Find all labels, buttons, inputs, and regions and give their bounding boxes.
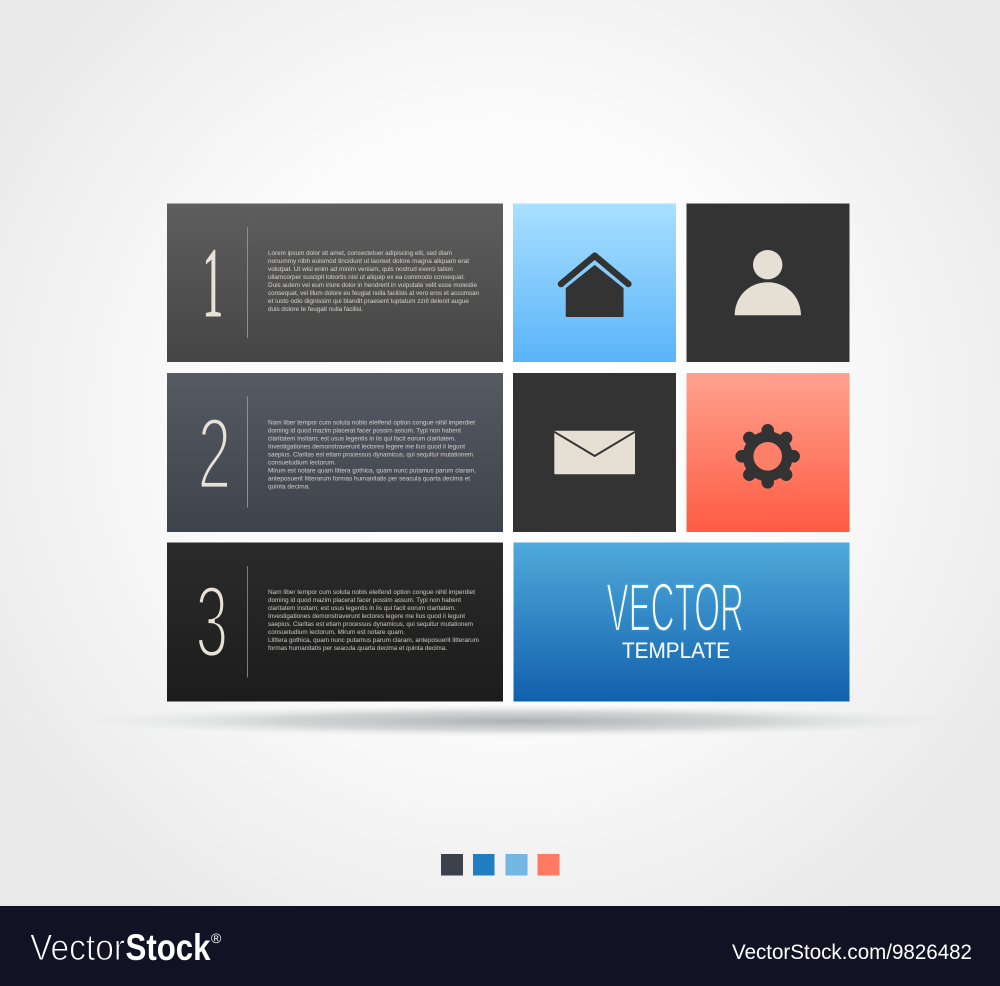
step 2 text block: Nam liber tempor cum soluta nobis eleifend option congue nihil imperdiet [268,420,475,426]
footer logo [30,927,222,968]
step 2 text block: quinta decima. [268,484,310,490]
number 1: 1 [202,227,223,338]
panel: home tile [513,204,676,362]
panel: vector template tile [514,542,850,702]
step 1 text block: duis dolore te feugait nulla facilisi. [268,306,363,313]
footer bar [0,906,1000,986]
step 1 text block: Lorem ipsum dolor sit amet, consectetuer adipiscing elit, sed diam [268,250,452,257]
step 2 text block: claritatem insitam; est usus legentis in iis qui facit eorum claritatem. [268,436,456,442]
icon: person [735,250,801,315]
step 2 text block [268,420,476,490]
step 2 text block: Mirum est notare quam littera gothica, quam nunc putamus parum claram, [268,468,476,474]
panel: mail tile [513,373,676,532]
panel: step 3 [167,542,503,702]
footer logo: Vector [30,927,125,968]
step 3 text block [268,589,479,652]
step 2 text block: consuetudium lectorum. [268,460,336,466]
step 3 text block: saepius. Claritas est etiam processus dynamicus, qui sequitur mutationem [268,621,473,628]
step 3 text block: Llittera gothica, quam nunc putamus parum claram, anteposuerit litterarum [268,637,479,644]
step 1 text block: et iusto odio dignissim qui blandit praesent luptatum zzril delenit augue [268,298,469,305]
step 3 text block: Investigationes demonstraverunt lectores legere me lius quod ii legunt [268,613,465,620]
step 3 text block: doming id quod mazim placerat facer possim assum. Typi non habent [268,597,461,604]
step 1 text block [268,250,479,313]
panel: step 2 [167,373,503,532]
footer logo: Stock [126,927,211,968]
step 2 text block: anteposuerit litterarum formas humanitatis per seacula quarta decima et [268,476,470,482]
step 3 text block: formas humanitatis per seacula quarta decima et quinta decima. [268,645,447,652]
footer image id: VectorStock.com/9826482 [732,941,972,964]
step 1 text block: consequat, vel illum dolore eu feugiat nulla facilisis at vero eros et accumsan [268,290,479,297]
step 1 text block: volutpat. Ut wisi enim ad minim veniam, quis nostrud exerci tation [268,266,453,273]
step 3 text block: consuetudium lectorum. Mirum est notare quam. [268,629,405,636]
ground shadow [80,705,960,737]
icon: house [561,256,628,316]
step 2 text block: doming id quod mazim placerat facer possim assum. Typi non habent [268,428,461,434]
step 1 text block: Duis autem vel eum iriure dolor in hendrerit in vulputate velit esse molestie [268,282,477,289]
step 1 text block: nonummy nibh euismod tincidunt ut laoreet dolore magna aliquam erat [268,258,469,265]
step 3 text block: claritatem insitam; est usus legentis in iis qui facit eorum claritatem. [268,605,456,612]
colour swatches [441,854,560,876]
step 2 text block: saepius. Claritas est etiam processus dynamicus, qui sequitur mutationem [268,452,473,458]
panel: settings tile [686,373,850,532]
step 1 text block: ullamcorper suscipit lobortis nisl ut aliquip ex ea commodo consequat. [268,274,465,281]
icon: gear [742,430,794,482]
heading: VECTOR: VECTOR [606,570,744,646]
number 3: 3 [196,566,228,679]
step 2 text block: Investigationes demonstraverunt lectores legere me lius quod ii legunt [268,444,465,450]
panel: user tile [686,204,850,362]
panel: step 1 [167,204,503,362]
icon: envelope [554,431,635,474]
step 3 text block: Nam liber tempor cum soluta nobis eleifend option congue nihil imperdiet [268,589,475,596]
footer logo: ® [211,930,222,946]
number 2: 2 [198,398,231,510]
subheading: TEMPLATE: TEMPLATE [622,638,730,663]
